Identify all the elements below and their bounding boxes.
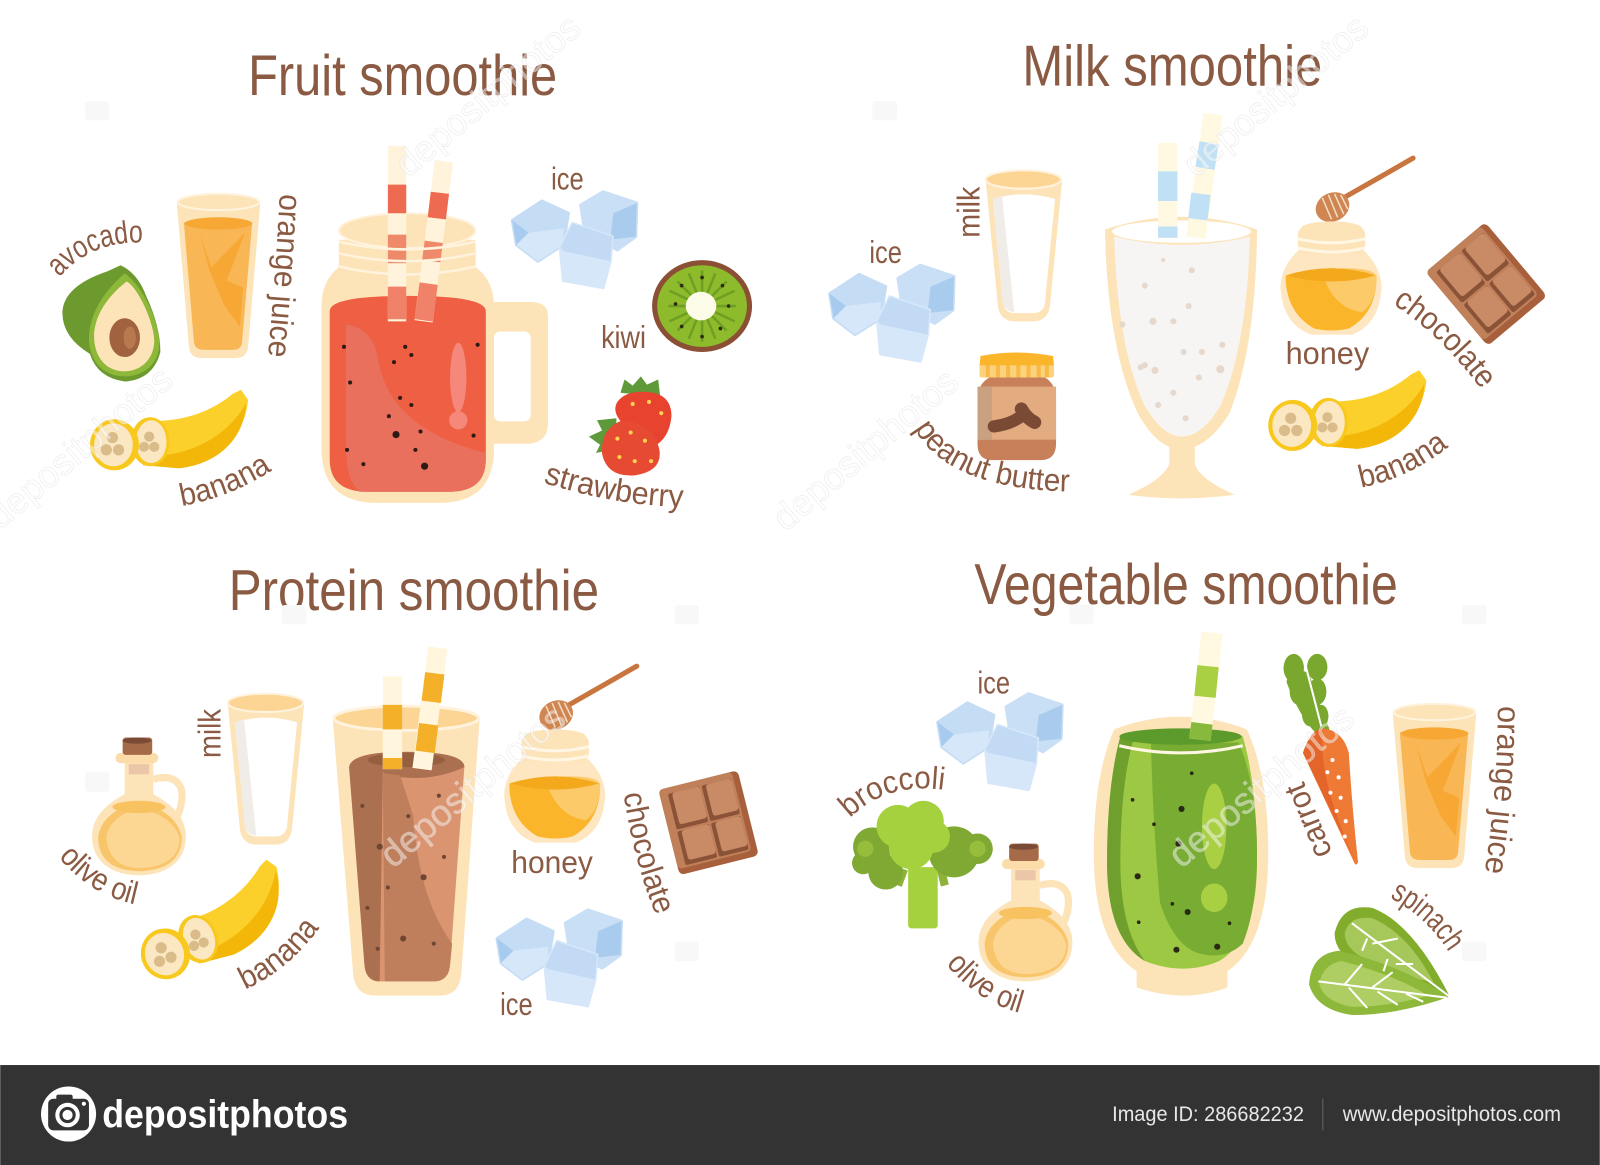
icon: chocolate xyxy=(658,770,759,875)
label: orange juice: orange juice xyxy=(1486,707,1516,873)
label: chocolate: chocolate xyxy=(624,794,670,913)
icon: honey xyxy=(504,666,637,843)
label: broccoli: broccoli xyxy=(836,766,945,817)
heading: fruit smoothie: Fruit smoothie xyxy=(248,44,557,108)
icon: ice xyxy=(938,694,1062,790)
panel: fruit smoothie xyxy=(50,44,752,514)
icon: carrot xyxy=(1284,654,1358,865)
icon: banana xyxy=(90,390,248,470)
icon: ice xyxy=(497,910,621,1006)
icon: orange juice xyxy=(1393,704,1476,868)
icon: honey xyxy=(1280,158,1413,335)
icon: kiwi xyxy=(652,260,752,352)
label: kiwi: kiwi xyxy=(601,319,646,355)
icon: ice xyxy=(830,265,954,361)
watermark: depositphotos xyxy=(1160,697,1362,875)
icon: broccoli xyxy=(852,801,993,928)
label: strawberry: strawberry xyxy=(545,468,684,514)
label: milk: milk xyxy=(192,709,228,758)
watermark: depositphotos xyxy=(372,697,573,875)
brand name: depositphotos xyxy=(102,1093,348,1136)
panel: vegetable smoothie xyxy=(836,553,1516,1015)
watermark: depositphotos xyxy=(1175,6,1376,185)
label: milk: milk xyxy=(951,187,987,238)
label: banana: banana xyxy=(1358,436,1449,488)
icon: banana xyxy=(124,857,300,986)
label: ice: ice xyxy=(500,986,533,1022)
label: honey: honey xyxy=(1286,335,1369,371)
label: avocado: avocado xyxy=(50,220,142,276)
label: honey: honey xyxy=(511,844,593,880)
label: ice: ice xyxy=(869,234,902,270)
icon: olive oil bottle xyxy=(979,844,1072,981)
label: banana: banana xyxy=(179,458,272,506)
icon: camera logo xyxy=(41,1086,96,1142)
label: olive oil: olive oil xyxy=(62,849,138,904)
image id: Image ID: 286682232 xyxy=(1112,1102,1304,1126)
label: banana: banana xyxy=(236,921,320,989)
heading: protein smoothie: Protein smoothie xyxy=(229,559,599,623)
label: olive oil: olive oil xyxy=(949,956,1024,1012)
label: peanut butter: peanut butter xyxy=(910,420,1070,492)
icon: avocado xyxy=(62,265,160,382)
watermark: depositphotos xyxy=(387,6,589,185)
icon: ice xyxy=(512,192,637,288)
panel: milk smoothie xyxy=(790,20,1545,528)
panel: protein smoothie xyxy=(62,559,758,1022)
website url: www.depositphotos.com xyxy=(1342,1102,1561,1126)
footer bar xyxy=(0,1065,1600,1165)
icon: milk glass xyxy=(986,170,1062,321)
watermark xyxy=(0,6,1487,961)
icon: peanut butter jar xyxy=(978,352,1056,460)
label: ice: ice xyxy=(978,665,1010,701)
heading: vegetable smoothie: Vegetable smoothie xyxy=(974,553,1398,617)
label: ice: ice xyxy=(551,161,584,197)
icon: olive oil bottle xyxy=(92,738,186,875)
watermark: depositphotos xyxy=(765,360,966,539)
icon: green smoothie glass xyxy=(1094,632,1268,996)
icon: strawberries xyxy=(589,376,671,476)
label: carrot: carrot xyxy=(1277,778,1339,864)
icon: chocolate xyxy=(1426,222,1547,346)
icon: milkshake glass xyxy=(1105,114,1257,498)
icon: orange juice xyxy=(177,194,260,358)
icon: milk glass xyxy=(228,694,304,845)
label: orange juice: orange juice xyxy=(266,195,296,356)
icon: protein smoothie glass xyxy=(333,648,480,996)
label: chocolate: chocolate xyxy=(1396,293,1492,386)
icon: banana xyxy=(1268,370,1426,451)
label: spinach: spinach xyxy=(1392,884,1462,951)
heading: milk smoothie: Milk smoothie xyxy=(1022,35,1322,99)
icon: mason jar smoothie xyxy=(322,146,548,503)
icon: spinach xyxy=(1309,907,1450,1015)
